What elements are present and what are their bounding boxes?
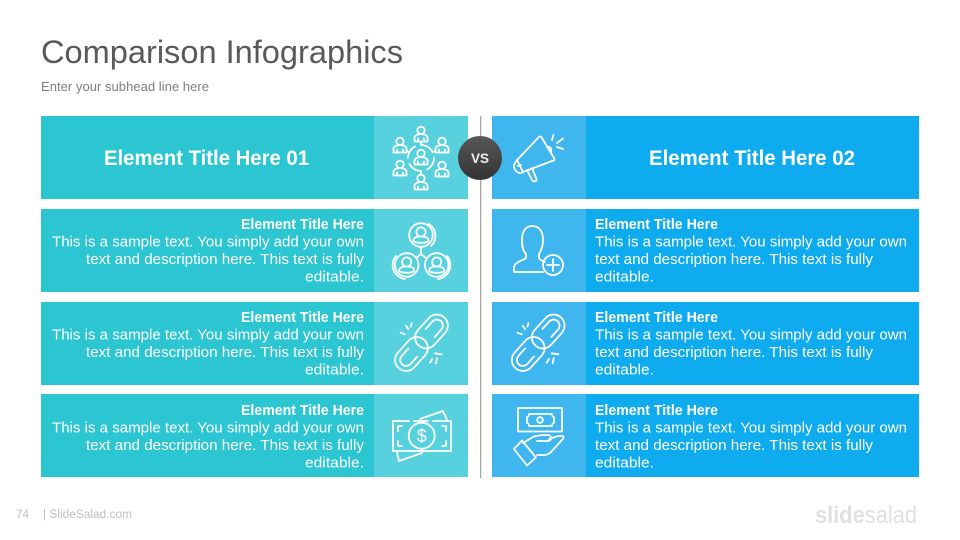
panel: right row 2	[492, 302, 919, 385]
text block: left row 3: editable.	[305, 456, 364, 472]
panel: left row 2	[41, 302, 468, 385]
text block: right row 3	[595, 403, 907, 472]
panel: left header	[41, 116, 468, 199]
subhead: Enter your subhead line here	[41, 80, 209, 94]
icon: money	[393, 411, 451, 461]
icon: chain link	[507, 310, 569, 375]
icon: money: $	[417, 426, 427, 446]
text block: left row 2: text and description here. This text is fully	[86, 345, 365, 361]
text block: left row 3	[52, 403, 365, 472]
text block: left row 3: Element Title Here	[241, 403, 364, 419]
text block: left row 2: This is a sample text. You simply add your own	[52, 328, 364, 344]
title: Comparison Infographics	[41, 34, 403, 70]
text block: left row 3: text and description here. This text is fully	[86, 438, 365, 454]
panel: right row 1	[492, 209, 919, 292]
text block: left row 2: Element Title Here	[241, 310, 364, 326]
panel: right header	[492, 116, 919, 199]
logo: slidesalad: slidesalad	[815, 502, 917, 529]
icon: add user	[514, 226, 563, 275]
icon: people network	[394, 127, 448, 190]
text block: right row 1: This is a sample text. You simply add your own	[595, 234, 907, 250]
text block: right row 3: text and description here. This text is fully	[595, 438, 874, 454]
panel: left row 3	[41, 394, 468, 477]
text block: right row 3: This is a sample text. You simply add your own	[595, 420, 907, 436]
heading: element title 02: Element Title Here 02	[649, 147, 855, 170]
text block: right row 3: Element Title Here	[595, 403, 718, 419]
text block: right row 1: editable.	[595, 270, 654, 286]
panel: left row 1	[41, 209, 468, 292]
heading: element title 01: Element Title Here 01	[104, 147, 309, 170]
icon: connected users	[393, 223, 450, 279]
text block: right row 3: editable.	[595, 456, 654, 472]
icon: hand holding cash	[514, 408, 563, 466]
text block: left row 1: Element Title Here	[241, 217, 364, 233]
text block: right row 1	[595, 217, 907, 286]
VS badge	[458, 136, 502, 180]
text block: left row 2	[52, 310, 365, 378]
footer: page number: 74	[16, 509, 30, 521]
panel: right row 3	[492, 394, 919, 477]
text block: left row 1: This is a sample text. You simply add your own	[52, 234, 364, 250]
text block: right row 2: This is a sample text. You simply add your own	[595, 328, 907, 344]
VS badge: VS	[471, 151, 489, 166]
icon: chain link	[391, 310, 452, 375]
text block: right row 2: Element Title Here	[595, 310, 718, 326]
footer: website: | SlideSalad.com	[43, 509, 132, 521]
text block: right row 2: text and description here. This text is fully	[595, 345, 874, 361]
text block: right row 1: Element Title Here	[595, 217, 718, 233]
text block: right row 2: editable.	[595, 362, 654, 378]
text block: right row 2	[595, 310, 907, 378]
text block: left row 1: editable.	[305, 270, 364, 286]
icon: megaphone	[514, 135, 563, 181]
text block: left row 1: text and description here. This text is fully	[86, 252, 365, 268]
text block: right row 1: text and description here. This text is fully	[595, 252, 874, 268]
text block: left row 1	[52, 217, 365, 286]
center divider	[480, 116, 481, 478]
text block: left row 2: editable.	[305, 362, 364, 378]
text block: left row 3: This is a sample text. You simply add your own	[52, 420, 364, 436]
